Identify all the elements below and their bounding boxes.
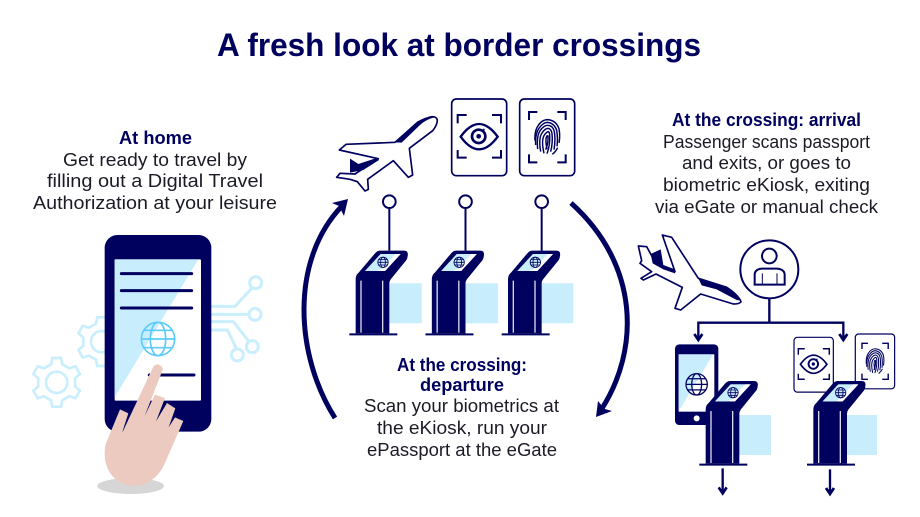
illustration: phone with hand [33,235,262,494]
text block: arrival: via eGate or manual check [655,197,879,217]
text block: departure: departure [420,375,504,395]
text block: departure: Scan your biometrics at [364,396,559,416]
icon: pointing hand [105,365,183,486]
icon: gears [33,317,125,407]
text block: departure [364,355,559,460]
text block: at home: At home [119,128,192,148]
kiosk 1 [349,195,422,334]
kiosk 3 [502,195,573,334]
plane: arriving [638,235,741,310]
text block: departure: the eKiosk, run your [377,418,547,438]
text block: departure: ePassport at the eGate [367,440,557,460]
text block: at home: Authorization at your leisure [33,193,277,213]
exit arrows [719,468,834,494]
title: A fresh look at border crossings [217,27,701,63]
arrow: left arc [304,199,348,418]
text block: arrival: biometric eKiosk, exiting [663,175,870,195]
text block: arrival: and exits, or goes to [682,153,851,173]
icon: small fingerprint card [855,334,895,389]
icon: eye scan card [452,99,507,176]
kiosk: arrival left [699,381,771,465]
arrow: right arc [571,203,627,417]
text block: arrival [655,110,879,217]
kiosk: arrival right [807,381,877,465]
icon: small eye card [794,337,833,392]
text block: at home: filling out a Digital Travel [47,171,263,191]
plane: departing [337,117,437,191]
icon: small phone [675,344,718,425]
icon: passenger in circle [740,240,798,298]
shadow [97,478,164,494]
text block: arrival: At the crossing: arrival [672,110,861,130]
branching arrows [694,298,847,340]
phone [105,235,211,432]
text block: at home [33,128,277,213]
text block: at home: Get ready to travel by [63,150,247,170]
icon: fingerprint card [520,99,575,176]
kiosk 2 [426,195,498,334]
text block: departure: At the crossing: [397,355,527,375]
text block: arrival: Passenger scans passport [663,132,870,152]
icon: circuit lines [210,277,262,361]
kiosks: departure row [349,195,573,334]
